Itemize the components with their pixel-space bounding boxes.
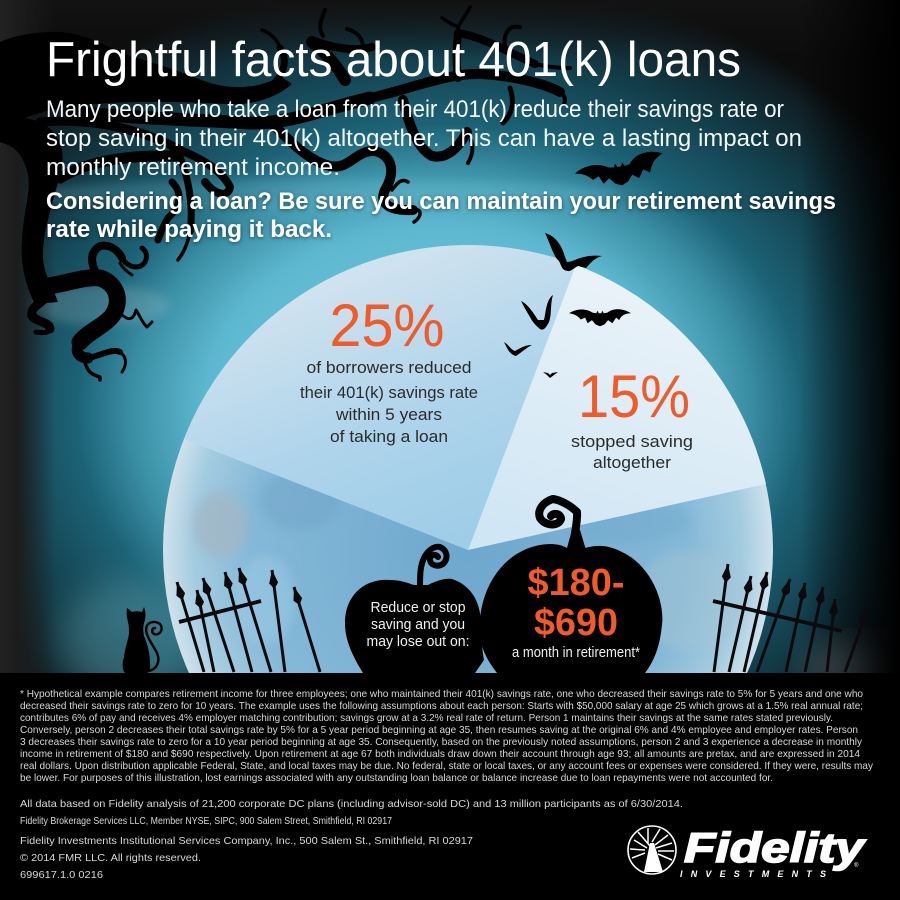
upper trunk mass [0, 32, 292, 304]
legal and source lines: All data based on Fidelity analysis of 21,200 corporate DC plans (including advisor-sold DC) and 13 million participants as of 6/30/2014. [20, 799, 683, 810]
legal and source lines: 699617.1.0 0216 [20, 870, 103, 881]
Fidelity Investments logo [628, 824, 867, 879]
stat: 25% borrowers: of borrowers reduced [306, 358, 472, 377]
bat: tiny [543, 372, 558, 378]
pumpkin caption: Reduce or stop [370, 600, 466, 616]
large pumpkin [480, 499, 662, 673]
left lower branches [60, 156, 175, 178]
drooping branch right [403, 100, 467, 157]
stat: 15% stopped [571, 363, 693, 472]
stat: 15% stopped: altogether [593, 453, 671, 472]
long middle branch [70, 98, 370, 123]
legal and source lines: © 2014 FMR LLC. All rights reserved. [20, 853, 201, 864]
legal and source lines [20, 799, 683, 881]
stat: 25% borrowers: of taking a loan [330, 427, 448, 446]
small pumpkin [345, 547, 484, 673]
footnote [20, 689, 874, 784]
upper root curl [92, 246, 122, 275]
stat: 15% stopped: 15% [578, 363, 690, 430]
savings loss figure [528, 562, 624, 644]
bat: wings raised [521, 295, 553, 330]
bold call to action: rate while paying it back. [46, 216, 332, 243]
bold call to action: Considering a loan? Be sure you can maintain your retirement savings [46, 188, 836, 215]
bats [504, 150, 667, 378]
legal and source lines: Fidelity Brokerage Services LLC, Member NYSE, SIPC, 900 Salem Street, Smithfield, RI 02917 [20, 816, 392, 827]
pumpkin stem [420, 547, 447, 586]
left curl [32, 297, 50, 329]
monthly caption: a month in retirement* [512, 645, 640, 661]
footnote: income in retirement of $180 and $690 respectively. Upon retirement at age 67 both individuals draw down their account through age 93; all amounts are pretax, and are expressed in 2014 [20, 749, 860, 760]
stat: 25% borrowers [300, 292, 478, 446]
bat: large upper right [573, 150, 667, 192]
right iron fence [713, 563, 872, 672]
footnote: contributes 6% of pay and receives 4% employer matching contribution; savings grow at a 3.2% real rate of return. Person 1 maintains their savings at the same rates stated previously. [20, 713, 833, 724]
pumpkin caption [366, 600, 470, 650]
footnote: decreased their savings rate to zero for 10 years. The example uses the following assumptions about each person: Starts with $50,000 salary at age 25 which grows at a 1.5% real annual rate; [20, 701, 863, 712]
bat: at moon edge [545, 233, 602, 271]
intro text: stop saving in their 401(k) altogether. This can have a lasting impact on [46, 125, 802, 152]
title: Frightful facts about 401(k) loans [46, 33, 741, 87]
pumpkin stem [539, 499, 577, 552]
stat: 15% stopped: stopped saving [571, 432, 693, 451]
footnote: 3 decreases their savings rate to zero for a 10 year period beginning at age 35. Consequently, based on the previously noted assumptions, person 2 and 3 experience a decrease in monthly [20, 737, 863, 748]
footnote: Conversely, person 2 decreases their total savings rate by 5% for a 5 year period beginning at age 35, then resumes saving at the original 6% and 4% employee and employer rates. Person [20, 725, 858, 736]
intro text: Many people who take a loan from their 401(k) reduce their savings rate or [46, 96, 784, 123]
15% wedge [468, 265, 766, 550]
footnote: * Hypothetical example compares retirement income for three employees; one who maintained their 401(k) savings rate, one who decreased their savings rate to 5% for 5 years and one who [20, 689, 863, 700]
intro text: monthly retirement income. [46, 154, 340, 181]
left iron fence [173, 567, 320, 672]
bat: small [504, 342, 532, 356]
pumpkin caption: may lose out on: [366, 634, 470, 650]
wordmark: Fidelity [684, 824, 867, 871]
spears [177, 568, 320, 672]
intro text [46, 96, 802, 181]
25% wedge [184, 245, 576, 550]
legal and source lines: Fidelity Investments Institutional Services Company, Inc., 500 Salem St., Smithfield, RI 02917 [20, 836, 473, 847]
footnote: real dollars. Upon distribution applicable Federal, State, and local taxes may be due. No federal, state or local taxes, or any account fees or expenses were considered. If they were, results may [20, 761, 874, 772]
top curls [262, 48, 284, 92]
middle hanging branch [270, 122, 413, 210]
stat: 25% borrowers: 25% [330, 292, 444, 359]
savings loss figure: $180- [528, 562, 624, 604]
moon craters [192, 478, 714, 646]
bat: flat on moon [569, 309, 631, 326]
stat: 25% borrowers: their 401(k) savings rate [300, 383, 478, 402]
footnote: be lower. For purposes of this illustration, lost earnings associated with any outstanding loan balance or balance increase due to loan repayments were not accounted for. [20, 773, 773, 784]
tagline: INVESTMENTS [680, 869, 826, 879]
spears [713, 564, 868, 672]
spooky tree branches [0, 7, 570, 380]
registered mark: ® [854, 862, 859, 869]
black footer band [0, 673, 900, 900]
stat: 25% borrowers: within 5 years [335, 405, 442, 424]
full moon pie chart [163, 245, 773, 673]
pumpkin caption: saving and you [371, 617, 465, 633]
icon: pyramid and sunburst [628, 826, 676, 874]
icon: black cat [123, 607, 162, 673]
savings loss figure: $690 [534, 602, 618, 644]
hanging root [48, 278, 117, 342]
bold call to action [46, 188, 836, 243]
